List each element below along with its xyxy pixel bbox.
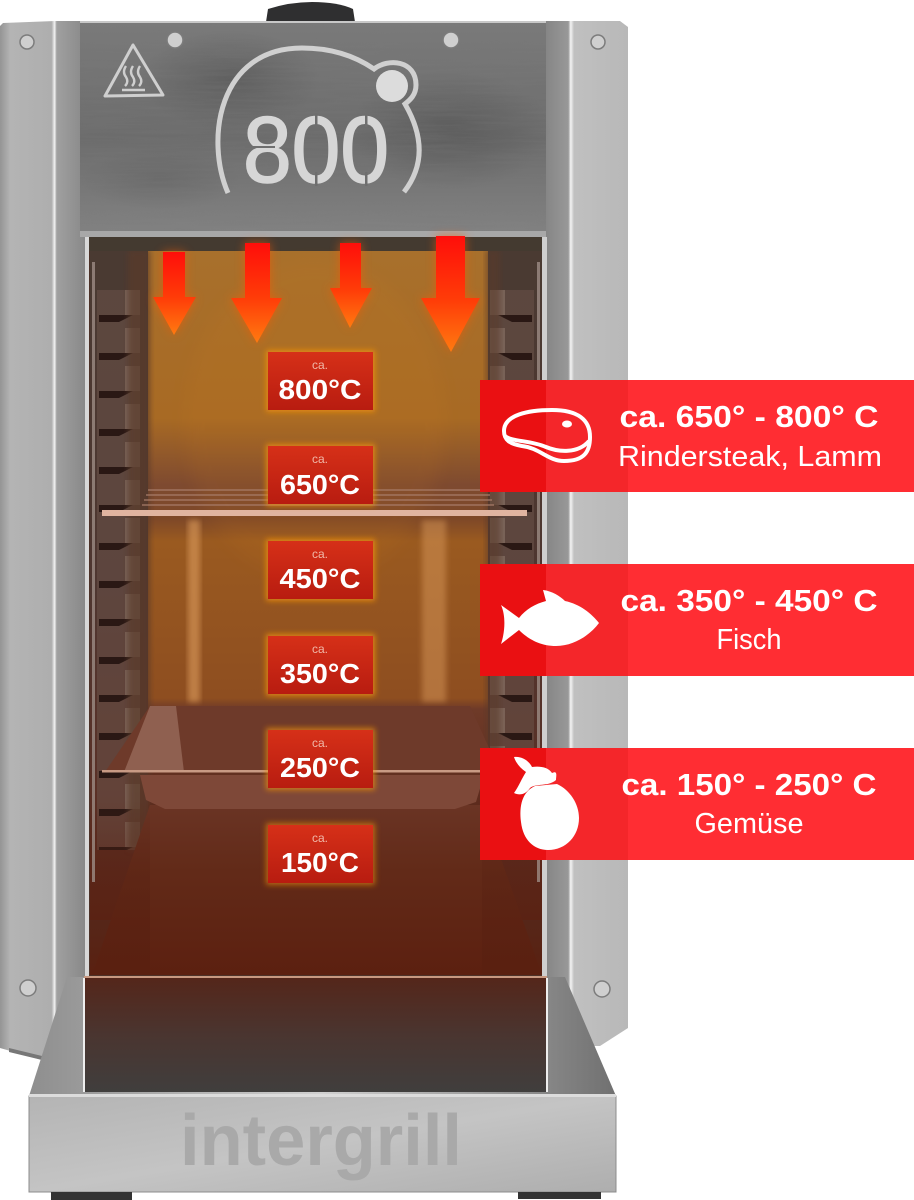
tray foot right [518, 1192, 601, 1199]
label: 800°C: 800°C [278, 374, 362, 405]
label: 250°C: 250°C [280, 752, 360, 783]
food label: Gemüse [694, 808, 804, 840]
label: 450°C: 450°C [280, 563, 360, 594]
temperature scale [266, 350, 375, 885]
logo: 800 [218, 48, 419, 202]
panel: fish 350-450 [480, 564, 914, 676]
tray foot left [51, 1192, 132, 1200]
label: 650°C [266, 444, 375, 506]
label: 350°C: 350°C [280, 658, 360, 689]
label: 250°C: ca. [312, 736, 328, 750]
icon: steak [504, 410, 590, 461]
arrow 2 [231, 243, 282, 343]
label: 450°C [266, 539, 375, 601]
panel: beef 650-800 [480, 380, 914, 492]
left side panel [0, 21, 86, 1060]
grill shelf [102, 490, 527, 516]
oven interior [85, 237, 547, 977]
food label: Rindersteak, Lamm [618, 441, 882, 473]
label: 150°C: ca. [312, 831, 328, 845]
label: 150°C: 150°C [281, 847, 359, 878]
bottom drip tray [29, 976, 616, 1200]
drip tray inside oven [102, 706, 500, 809]
arrow 4 [421, 236, 480, 352]
top metal panel [80, 21, 550, 237]
temperature heading: ca. 350° - 450° C [620, 583, 878, 618]
label: 450°C: ca. [312, 547, 328, 561]
icon: hot surface warning triangle [105, 45, 163, 96]
food label: Fisch [716, 624, 782, 656]
screws [20, 32, 610, 997]
temperature heading: ca. 150° - 250° C [622, 767, 876, 802]
right side panel [545, 21, 628, 1046]
label: 150°C [266, 823, 375, 885]
label: 800°C: ca. [312, 358, 328, 372]
arrow 3 [330, 243, 372, 328]
label: 350°C [266, 634, 375, 696]
brand name: intergrill [180, 1101, 462, 1181]
label: 650°C: 650°C [280, 469, 360, 500]
icon: fish [501, 590, 599, 646]
icon: eggplant [514, 757, 579, 850]
panel: vegetables 150-250 [480, 748, 914, 860]
temperature heading: ca. 650° - 800° C [620, 399, 878, 434]
logo: 800: 800 [243, 97, 389, 202]
label: 250°C [266, 728, 375, 790]
label: 800°C [266, 350, 375, 412]
label: 350°C: ca. [312, 642, 328, 656]
arrow 1 [153, 252, 196, 335]
knob on top of grill [266, 2, 355, 22]
heat arrows [153, 236, 480, 352]
label: 650°C: ca. [312, 452, 328, 466]
